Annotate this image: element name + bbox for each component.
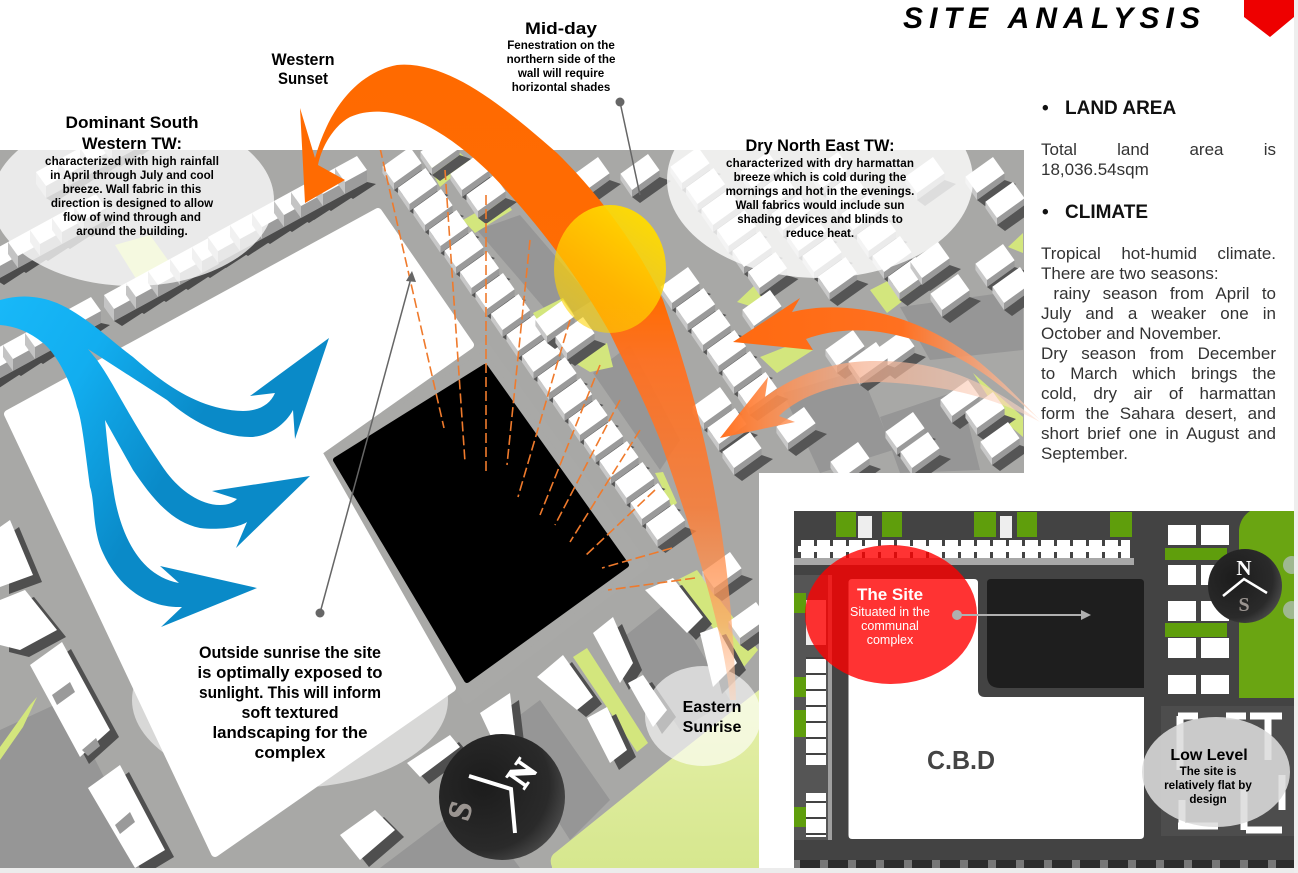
heading: land area: •	[1042, 98, 1049, 119]
text: climate description: form the Sahara desert, and	[1041, 404, 1276, 423]
parking blocks	[0, 215, 1023, 868]
icon: red tab	[1244, 0, 1294, 37]
text: dry north east trade wind: Dry North East TW:	[746, 136, 894, 155]
black building footprint	[987, 579, 1144, 688]
right hand courtyards	[1165, 548, 1227, 637]
white site plot	[8, 212, 470, 853]
text: climate description: October and November.	[1041, 324, 1221, 343]
label: mid-day: Fenestration on the	[507, 39, 615, 52]
text: dominant south western trade wind: Western TW:	[82, 134, 182, 153]
text: low level: The site is	[1180, 765, 1236, 778]
text: the site: complex	[867, 633, 914, 647]
sun ray dashed lines	[380, 148, 695, 590]
arrow: dry north east wind lower	[720, 361, 1040, 438]
text: climate description: rainy season from April to	[1053, 284, 1276, 303]
text: dominant south western trade wind: breeze. Wall fabric in this	[63, 183, 201, 196]
text: the site: Situated in the	[850, 605, 930, 619]
text: dry north east trade wind: characterized with dry harmattan	[726, 157, 914, 170]
heading: climate: CLIMATE	[1065, 202, 1148, 223]
text: low level	[1164, 747, 1252, 806]
label: mid-day: wall will require	[517, 67, 605, 80]
text: climate description: July and a weaker one in	[1041, 304, 1276, 323]
panel: location inset map	[794, 511, 1298, 868]
bubble: low level	[1142, 717, 1290, 827]
text: dry north east trade wind: breeze which is cold during the	[734, 171, 907, 184]
text panel: land area and climate	[1041, 98, 1276, 463]
icon: north compass on inset map	[1208, 549, 1282, 623]
text: climate description: Tropical hot-humid climate.	[1041, 244, 1276, 263]
lime lawn	[551, 690, 759, 868]
white central business district plot	[848, 579, 1144, 839]
label: eastern sunrise: Eastern	[683, 699, 741, 716]
text: climate description: Dry season from December	[1041, 344, 1276, 363]
icon: north compass on main map: S	[440, 797, 479, 824]
green park	[1239, 511, 1298, 698]
black building footprint	[336, 367, 626, 680]
icon: north compass on main map	[439, 734, 565, 860]
arrow: south west wind branches	[0, 296, 329, 627]
text: dominant south western trade wind: Dominant South	[66, 113, 198, 132]
text: climate description: short brief one in August and	[1041, 424, 1276, 443]
icon: mid-day sun	[554, 205, 666, 333]
text: sunrise exposure note: landscaping for the	[212, 723, 368, 742]
leader line: site exposure	[316, 271, 416, 618]
lower right housing	[1161, 706, 1294, 836]
bottom road and roofs	[794, 860, 1294, 868]
text: dominant south western trade wind	[45, 113, 219, 238]
text: dominant south western trade wind: flow of wind through and	[63, 211, 201, 224]
left housing column	[794, 575, 832, 840]
text: the site	[850, 585, 930, 647]
label: C.B.D: C.B.D	[927, 745, 995, 775]
top green courtyards	[836, 512, 1132, 537]
text: dominant south western trade wind: direction is designed to allow	[51, 197, 214, 210]
text: sunrise exposure note: complex	[254, 743, 326, 762]
text: the site: communal	[861, 619, 919, 633]
text: the site: The Site	[857, 585, 923, 604]
bottom strip	[0, 868, 1298, 873]
text: land area value: 18,036.54sqm	[1041, 160, 1149, 179]
leader line: mid-day	[616, 98, 640, 195]
text: sunrise exposure note	[198, 643, 382, 762]
icon: north compass on inset map: S	[1238, 594, 1250, 616]
text: sunrise exposure note: Outside sunrise the site	[199, 643, 381, 662]
label: eastern sunrise	[683, 699, 741, 736]
text: sunrise exposure note: sunlight. This will inform	[199, 683, 381, 702]
bubble: eastern sunrise	[645, 666, 761, 766]
text: climate description: There are two seasons:	[1041, 264, 1219, 283]
text: dry north east trade wind: Wall fabrics would include sun	[736, 199, 904, 212]
arrow: dry north east wind upper	[733, 298, 1040, 420]
label: western sunset	[272, 50, 334, 88]
label: mid-day: horizontal shades	[512, 81, 610, 94]
text: climate description: September.	[1041, 444, 1128, 463]
top housing row	[794, 516, 1134, 565]
text: land area value: Total land area is	[1041, 140, 1276, 159]
bubble: south west wind	[0, 150, 274, 286]
bubble: north east wind	[667, 150, 972, 278]
text: low level: Low Level	[1170, 747, 1248, 764]
icon: north compass on inset map: N	[1236, 556, 1252, 580]
right hand housing	[1168, 525, 1229, 694]
text: sunrise exposure note: is optimally exposed to	[198, 663, 382, 682]
label: western sunset: Western	[272, 50, 334, 69]
bubble: sunrise exposure note	[132, 689, 448, 786]
text: dry north east trade wind: reduce heat.	[786, 227, 854, 240]
text: dry north east trade wind: shading devices and blinds to	[737, 213, 903, 226]
text: low level: relatively flat by	[1164, 779, 1252, 792]
label: mid-day	[507, 19, 616, 94]
text: low level: design	[1189, 793, 1227, 806]
heading: land area: LAND AREA	[1065, 98, 1176, 119]
text: land area value	[1041, 140, 1276, 179]
label: mid-day: Mid-day	[525, 19, 598, 38]
panel: aerial site map	[0, 150, 1024, 868]
label: eastern sunrise: Sunrise	[683, 719, 741, 736]
right edge strip	[1294, 0, 1298, 873]
text: dry north east trade wind: mornings and hot in the evenings.	[726, 185, 914, 198]
text: dominant south western trade wind: in April through July and cool	[50, 169, 214, 182]
text: climate description	[1041, 244, 1276, 463]
label: western sunset: Sunset	[278, 69, 328, 88]
text: sunrise exposure note: soft textured	[242, 703, 338, 722]
icon: north compass on main map: N	[500, 753, 545, 795]
label: mid-day: northern side of the	[507, 53, 616, 66]
housing rows	[0, 112, 1043, 651]
title: SITE ANALYSIS	[903, 2, 1200, 35]
large houses near the lawn and lower left	[0, 520, 746, 873]
road around plot	[315, 345, 645, 700]
text: dominant south western trade wind: characterized with high rainfall	[45, 155, 219, 168]
red site marker	[805, 545, 977, 684]
arrow: site pointer	[952, 610, 1091, 620]
text: climate description: to March which brings the	[1041, 364, 1276, 383]
text: dry north east trade wind	[726, 136, 914, 240]
arrow: sun path from sunrise to sunset	[300, 65, 736, 700]
text: climate description: cold, dry air of harmattan	[1041, 384, 1276, 403]
heading: climate: •	[1042, 202, 1049, 223]
lime green patches	[0, 153, 1023, 760]
text: dominant south western trade wind: around the building.	[76, 225, 188, 238]
